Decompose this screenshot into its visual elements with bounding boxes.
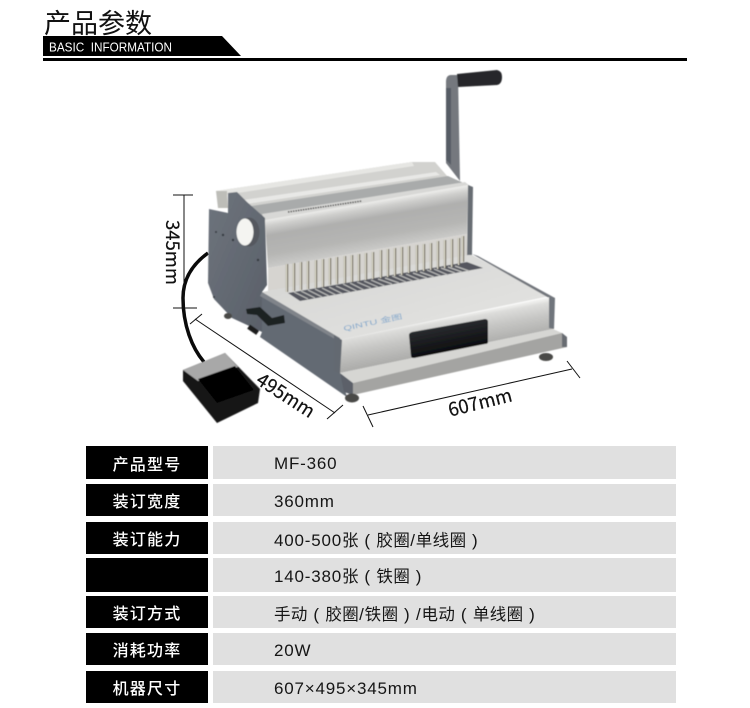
binding machine	[208, 70, 567, 402]
icon: foot pedal cable	[183, 253, 208, 362]
foot pads	[224, 313, 553, 402]
left side panel	[208, 192, 267, 332]
value: power	[213, 633, 676, 665]
value: capacity iron: 140-380张 ( 铁圈 )	[274, 563, 422, 587]
label: 产品型号	[86, 446, 208, 479]
base plate	[340, 329, 562, 383]
value: capacity iron	[213, 558, 676, 592]
label: 装订能力: 装订能力	[113, 526, 181, 550]
product illustration with dimensions	[160, 69, 580, 428]
label: 消耗功率	[86, 633, 208, 665]
label: 产品型号: 产品型号	[113, 450, 181, 474]
value: capacity	[213, 522, 676, 554]
foot pedal	[183, 353, 260, 423]
top plate	[262, 255, 550, 340]
dimension: depth 495mm	[190, 314, 343, 424]
label: blank	[86, 558, 208, 592]
label: 装订宽度	[86, 484, 208, 516]
header banner	[43, 36, 241, 56]
label: 机器尺寸: 机器尺寸	[113, 675, 181, 699]
value: size: 607×495×345mm	[274, 679, 418, 698]
comb fingers	[286, 236, 463, 292]
label: 装订方式: 装订方式	[113, 600, 181, 624]
label: 装订能力	[86, 522, 208, 554]
value: capacity: 400-500张 ( 胶圈/单线圈 )	[274, 527, 478, 551]
dimension: height 345mm	[160, 195, 197, 308]
base side panel	[260, 292, 347, 397]
upper front panel	[265, 185, 468, 268]
label: 装订方式	[86, 596, 208, 628]
handle grip	[457, 70, 502, 87]
label: 装订宽度: 装订宽度	[113, 488, 181, 512]
knob	[236, 218, 260, 246]
header banner: BASIC INFORMATION	[49, 40, 172, 54]
machine logo: QINTU 金图	[343, 312, 403, 333]
dimension: width 607mm: 607mm	[445, 382, 515, 422]
dimension: depth 495mm: 495mm	[252, 366, 320, 424]
lever	[246, 307, 285, 326]
title: 产品参数	[44, 2, 152, 41]
rear top cover	[216, 162, 470, 222]
right edge strip	[467, 185, 473, 258]
value: method	[213, 596, 676, 628]
label: 机器尺寸	[86, 671, 208, 703]
side screws	[213, 231, 259, 298]
front body	[340, 297, 553, 373]
punch slots	[288, 262, 483, 301]
value: size	[213, 671, 676, 703]
value: model	[213, 446, 676, 479]
dimension: width 607mm	[363, 361, 580, 427]
feed scale	[288, 201, 362, 212]
value: width	[213, 484, 676, 516]
handle post	[446, 75, 460, 181]
value: power: 20W	[274, 641, 311, 660]
value: width: 360mm	[274, 492, 335, 511]
value: model: MF-360	[274, 454, 337, 473]
black front grip	[409, 319, 488, 358]
base corner caps	[562, 333, 567, 347]
value: method: 手动 ( 胶圈/铁圈 ) /电动 ( 单线圈 )	[274, 601, 536, 625]
dimension: height 345mm: 345mm	[160, 220, 186, 285]
label: 消耗功率: 消耗功率	[113, 637, 181, 661]
header rule	[43, 58, 687, 61]
